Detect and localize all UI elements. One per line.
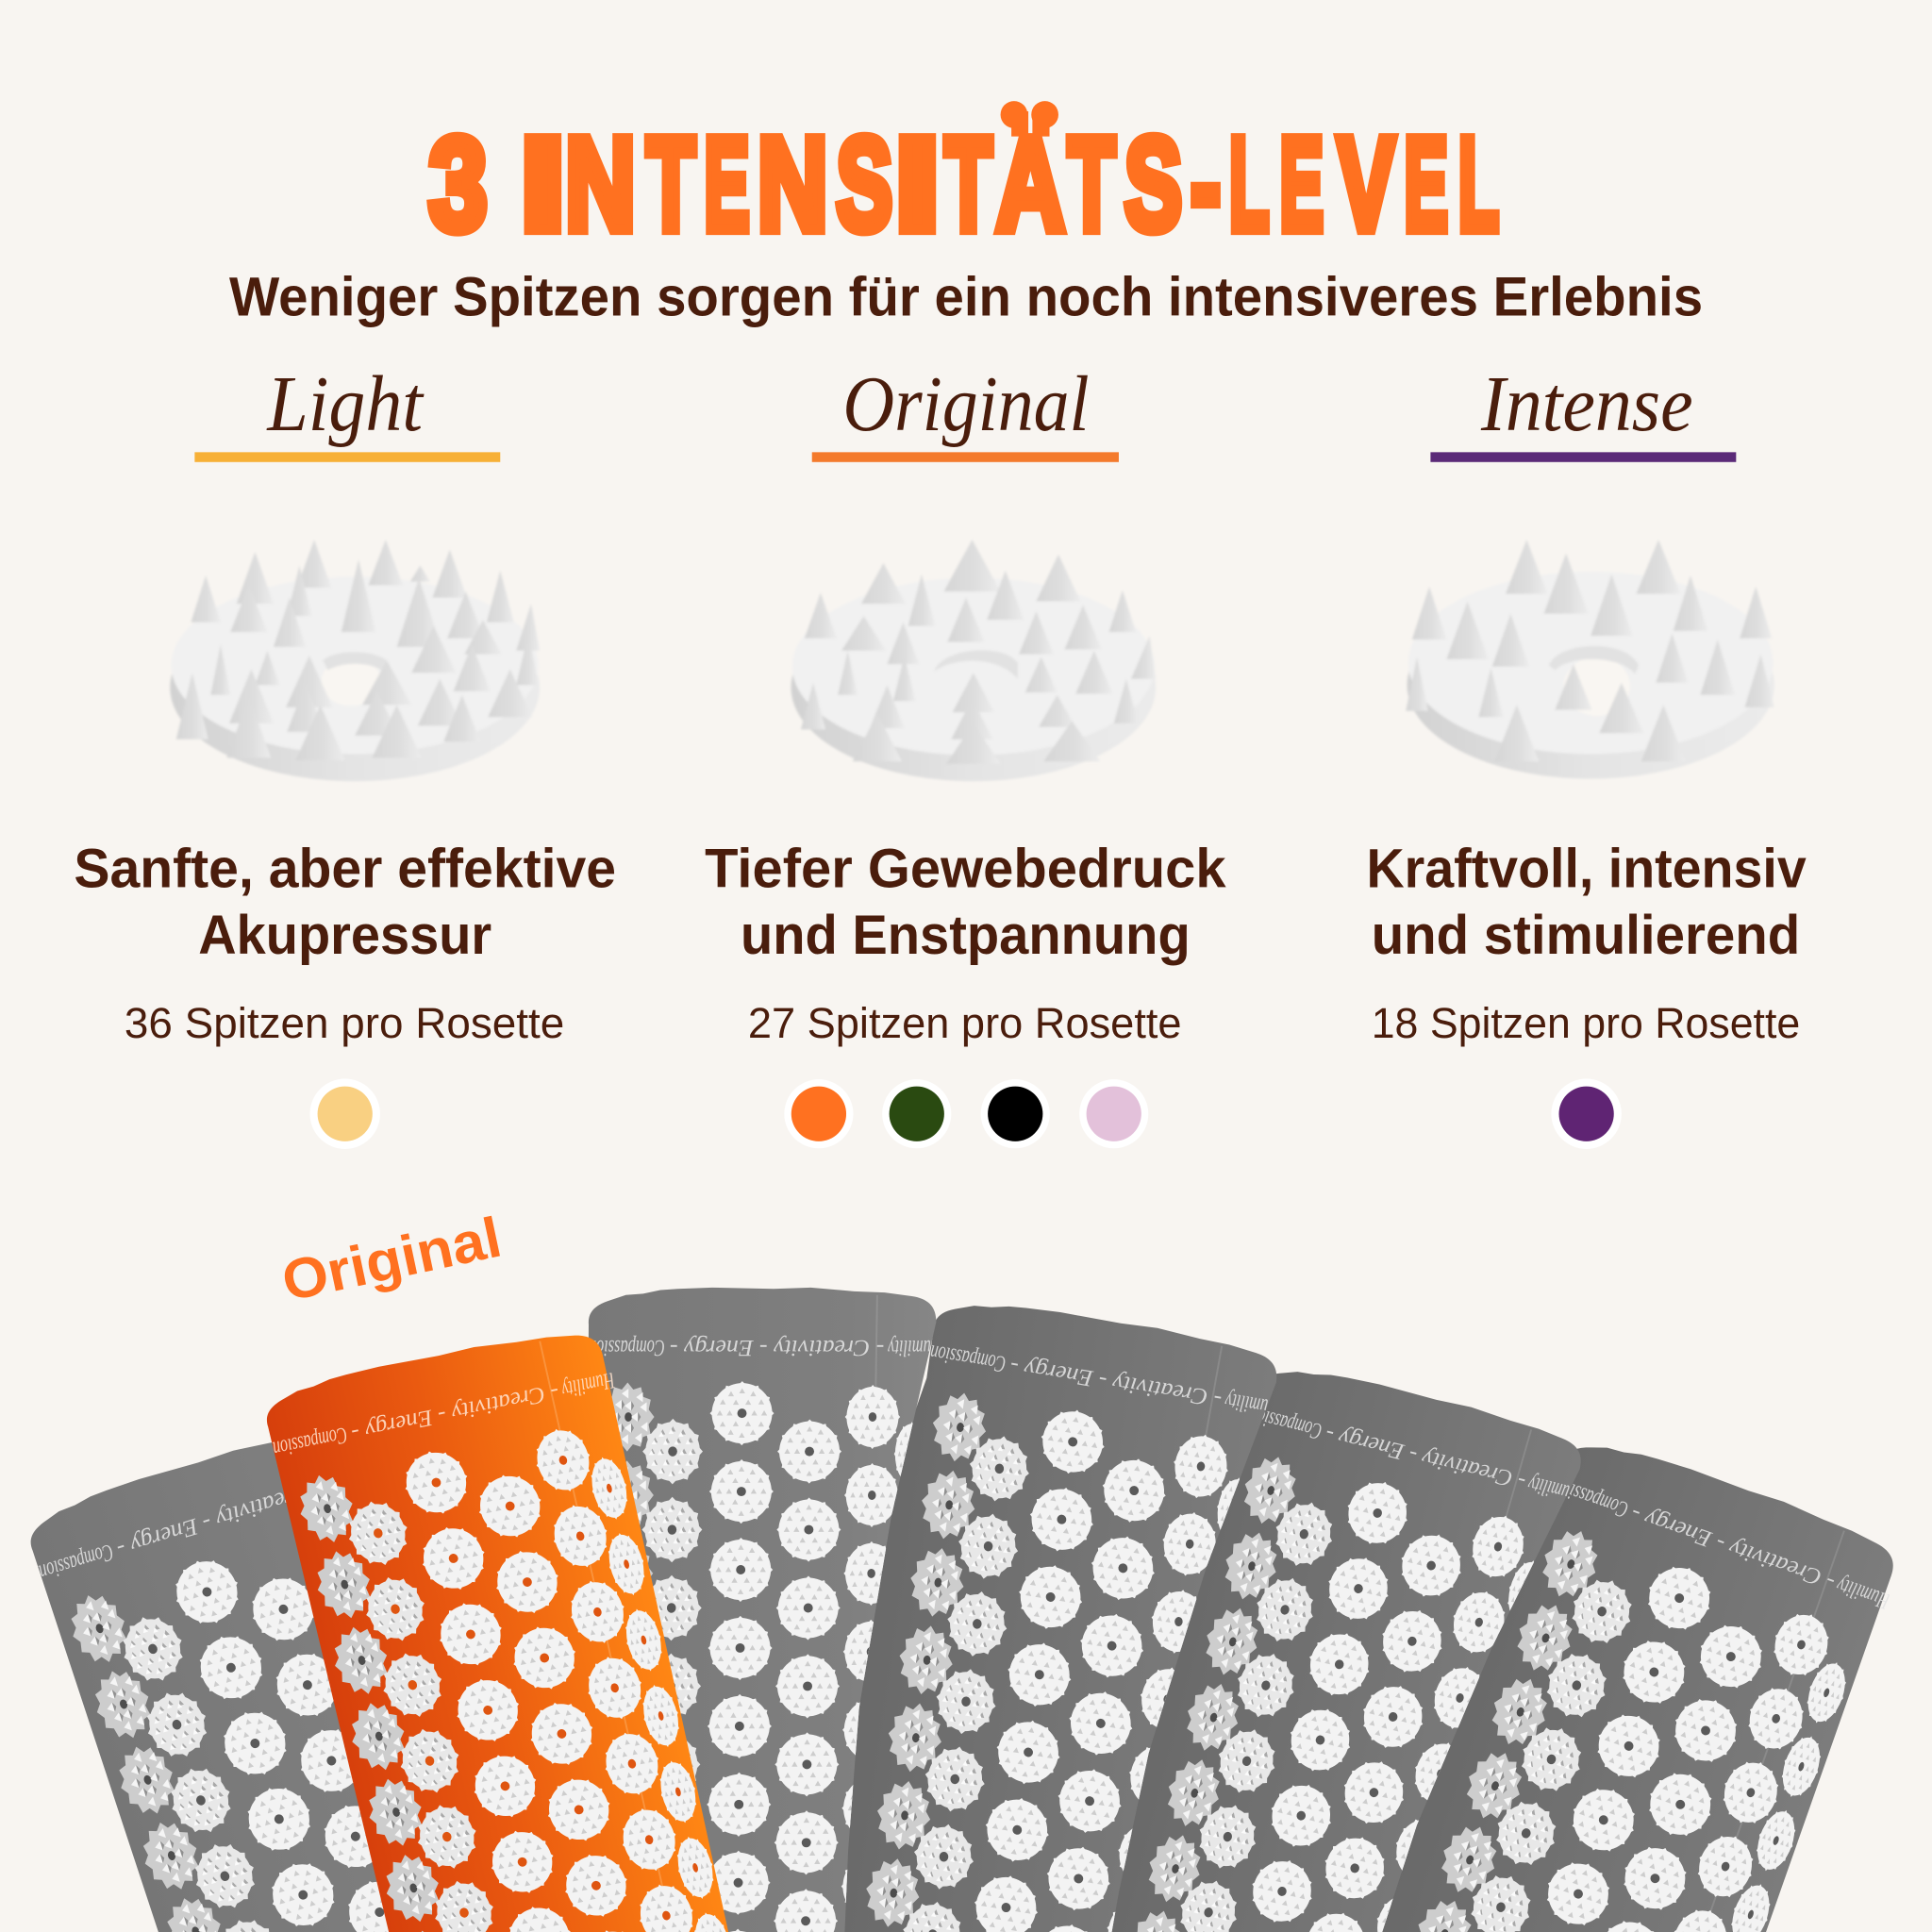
title: S bbox=[837, 109, 892, 258]
underline: Light bbox=[194, 452, 500, 462]
benefit heading: Intense: und stimulierend bbox=[1372, 905, 1800, 966]
icon: rosette with 36 spikes bbox=[170, 540, 540, 781]
title: E bbox=[1280, 109, 1324, 258]
benefit heading: Original: und Enstpannung bbox=[741, 905, 1191, 966]
benefit heading: Light: Akupressur bbox=[198, 905, 491, 966]
benefit heading: Light: Sanfte, aber effektive bbox=[74, 838, 616, 899]
title: Ä bbox=[996, 109, 1065, 258]
underline: Intense bbox=[1430, 452, 1736, 462]
level name: Light: Light bbox=[266, 361, 425, 448]
mat: grey left: - Creativity - Energy - bbox=[113, 1475, 326, 1561]
mat: grey centre right: Humility bbox=[1223, 1388, 1281, 1422]
mat: grey centre bbox=[589, 1287, 936, 1932]
title: V bbox=[1338, 109, 1395, 258]
spike count: Intense: 18 Spitzen pro Rosette bbox=[1372, 999, 1800, 1047]
level name: Intense: Intense bbox=[1480, 361, 1693, 448]
mat: grey far right: Humility bbox=[1834, 1572, 1893, 1614]
subtitle: Weniger Spitzen sorgen für ein noch intensiveres Erlebnis bbox=[229, 266, 1703, 327]
benefit heading: Intense: Kraftvoll, intensiv bbox=[1366, 838, 1807, 899]
title: I bbox=[520, 109, 566, 258]
title: L bbox=[1458, 109, 1499, 258]
title: T bbox=[646, 109, 695, 258]
colour swatch: yellow bbox=[309, 1079, 380, 1149]
column: Light bbox=[74, 361, 616, 1149]
title: T bbox=[944, 109, 992, 258]
mat: grey left bbox=[30, 1442, 387, 1932]
mat: grey right: Humility bbox=[1525, 1471, 1583, 1508]
column: Intense bbox=[1366, 361, 1807, 1149]
level name: Original: Original bbox=[842, 361, 1090, 448]
colour swatches: Original bbox=[784, 1079, 1148, 1148]
icon: rosette with 27 spikes bbox=[791, 540, 1156, 781]
title: N bbox=[565, 109, 636, 258]
mat: grey centre: Humility bbox=[887, 1335, 942, 1360]
title: I bbox=[894, 109, 941, 258]
title: 3 bbox=[429, 109, 487, 258]
title: N bbox=[758, 109, 827, 258]
title: E bbox=[704, 109, 750, 258]
mat: grey left: Compassion bbox=[36, 1539, 117, 1585]
underline: Original bbox=[812, 452, 1119, 462]
benefit heading: Original bbox=[705, 838, 1226, 966]
spike count: Original: 27 Spitzen pro Rosette bbox=[748, 999, 1182, 1047]
colour swatch: purple bbox=[1551, 1079, 1622, 1149]
title: - bbox=[1191, 109, 1221, 258]
mat: grey centre right: Compassion bbox=[928, 1340, 1008, 1377]
mats fan bbox=[21, 1278, 1908, 1932]
mat: grey centre: - Creativity - Energy - bbox=[670, 1335, 884, 1360]
mat: grey centre: Compassion bbox=[589, 1335, 665, 1360]
column: Original bbox=[705, 361, 1226, 1148]
mat: grey right bbox=[1111, 1372, 1581, 1932]
benefit heading: Original: Tiefer Gewebedruck bbox=[705, 838, 1226, 899]
mat: grey centre right bbox=[844, 1306, 1277, 1932]
title bbox=[429, 101, 1499, 258]
title: S bbox=[1124, 109, 1182, 258]
mat: grey right: - Creativity - Energy - bbox=[1323, 1421, 1528, 1495]
benefit heading: Light bbox=[74, 838, 616, 966]
mat: orange highlighted bbox=[266, 1336, 728, 1932]
title: L bbox=[1229, 109, 1269, 258]
spike count: Light: 36 Spitzen pro Rosette bbox=[125, 999, 564, 1047]
title: E bbox=[1404, 109, 1448, 258]
label: Original mat: Original bbox=[276, 1206, 507, 1313]
title: T bbox=[1068, 109, 1115, 258]
mat: orange highlighted: - Creativity - Energy - bbox=[349, 1378, 561, 1446]
icon: rosette with 18 spikes bbox=[1406, 540, 1774, 778]
mat: grey centre right: - Creativity - Energy - bbox=[1008, 1353, 1224, 1412]
mat: grey far right: Compassion bbox=[1551, 1474, 1631, 1523]
mat: grey right: Compassion bbox=[1247, 1402, 1324, 1444]
mat: orange highlighted: Humility bbox=[559, 1367, 618, 1403]
mat: grey far right: - Creativity - Energy - bbox=[1628, 1500, 1839, 1595]
mat: grey far right bbox=[1382, 1447, 1893, 1932]
mat: orange highlighted: Compassion bbox=[271, 1422, 350, 1462]
mat: grey left: Humility bbox=[322, 1458, 382, 1499]
benefit heading: Intense bbox=[1366, 838, 1807, 966]
